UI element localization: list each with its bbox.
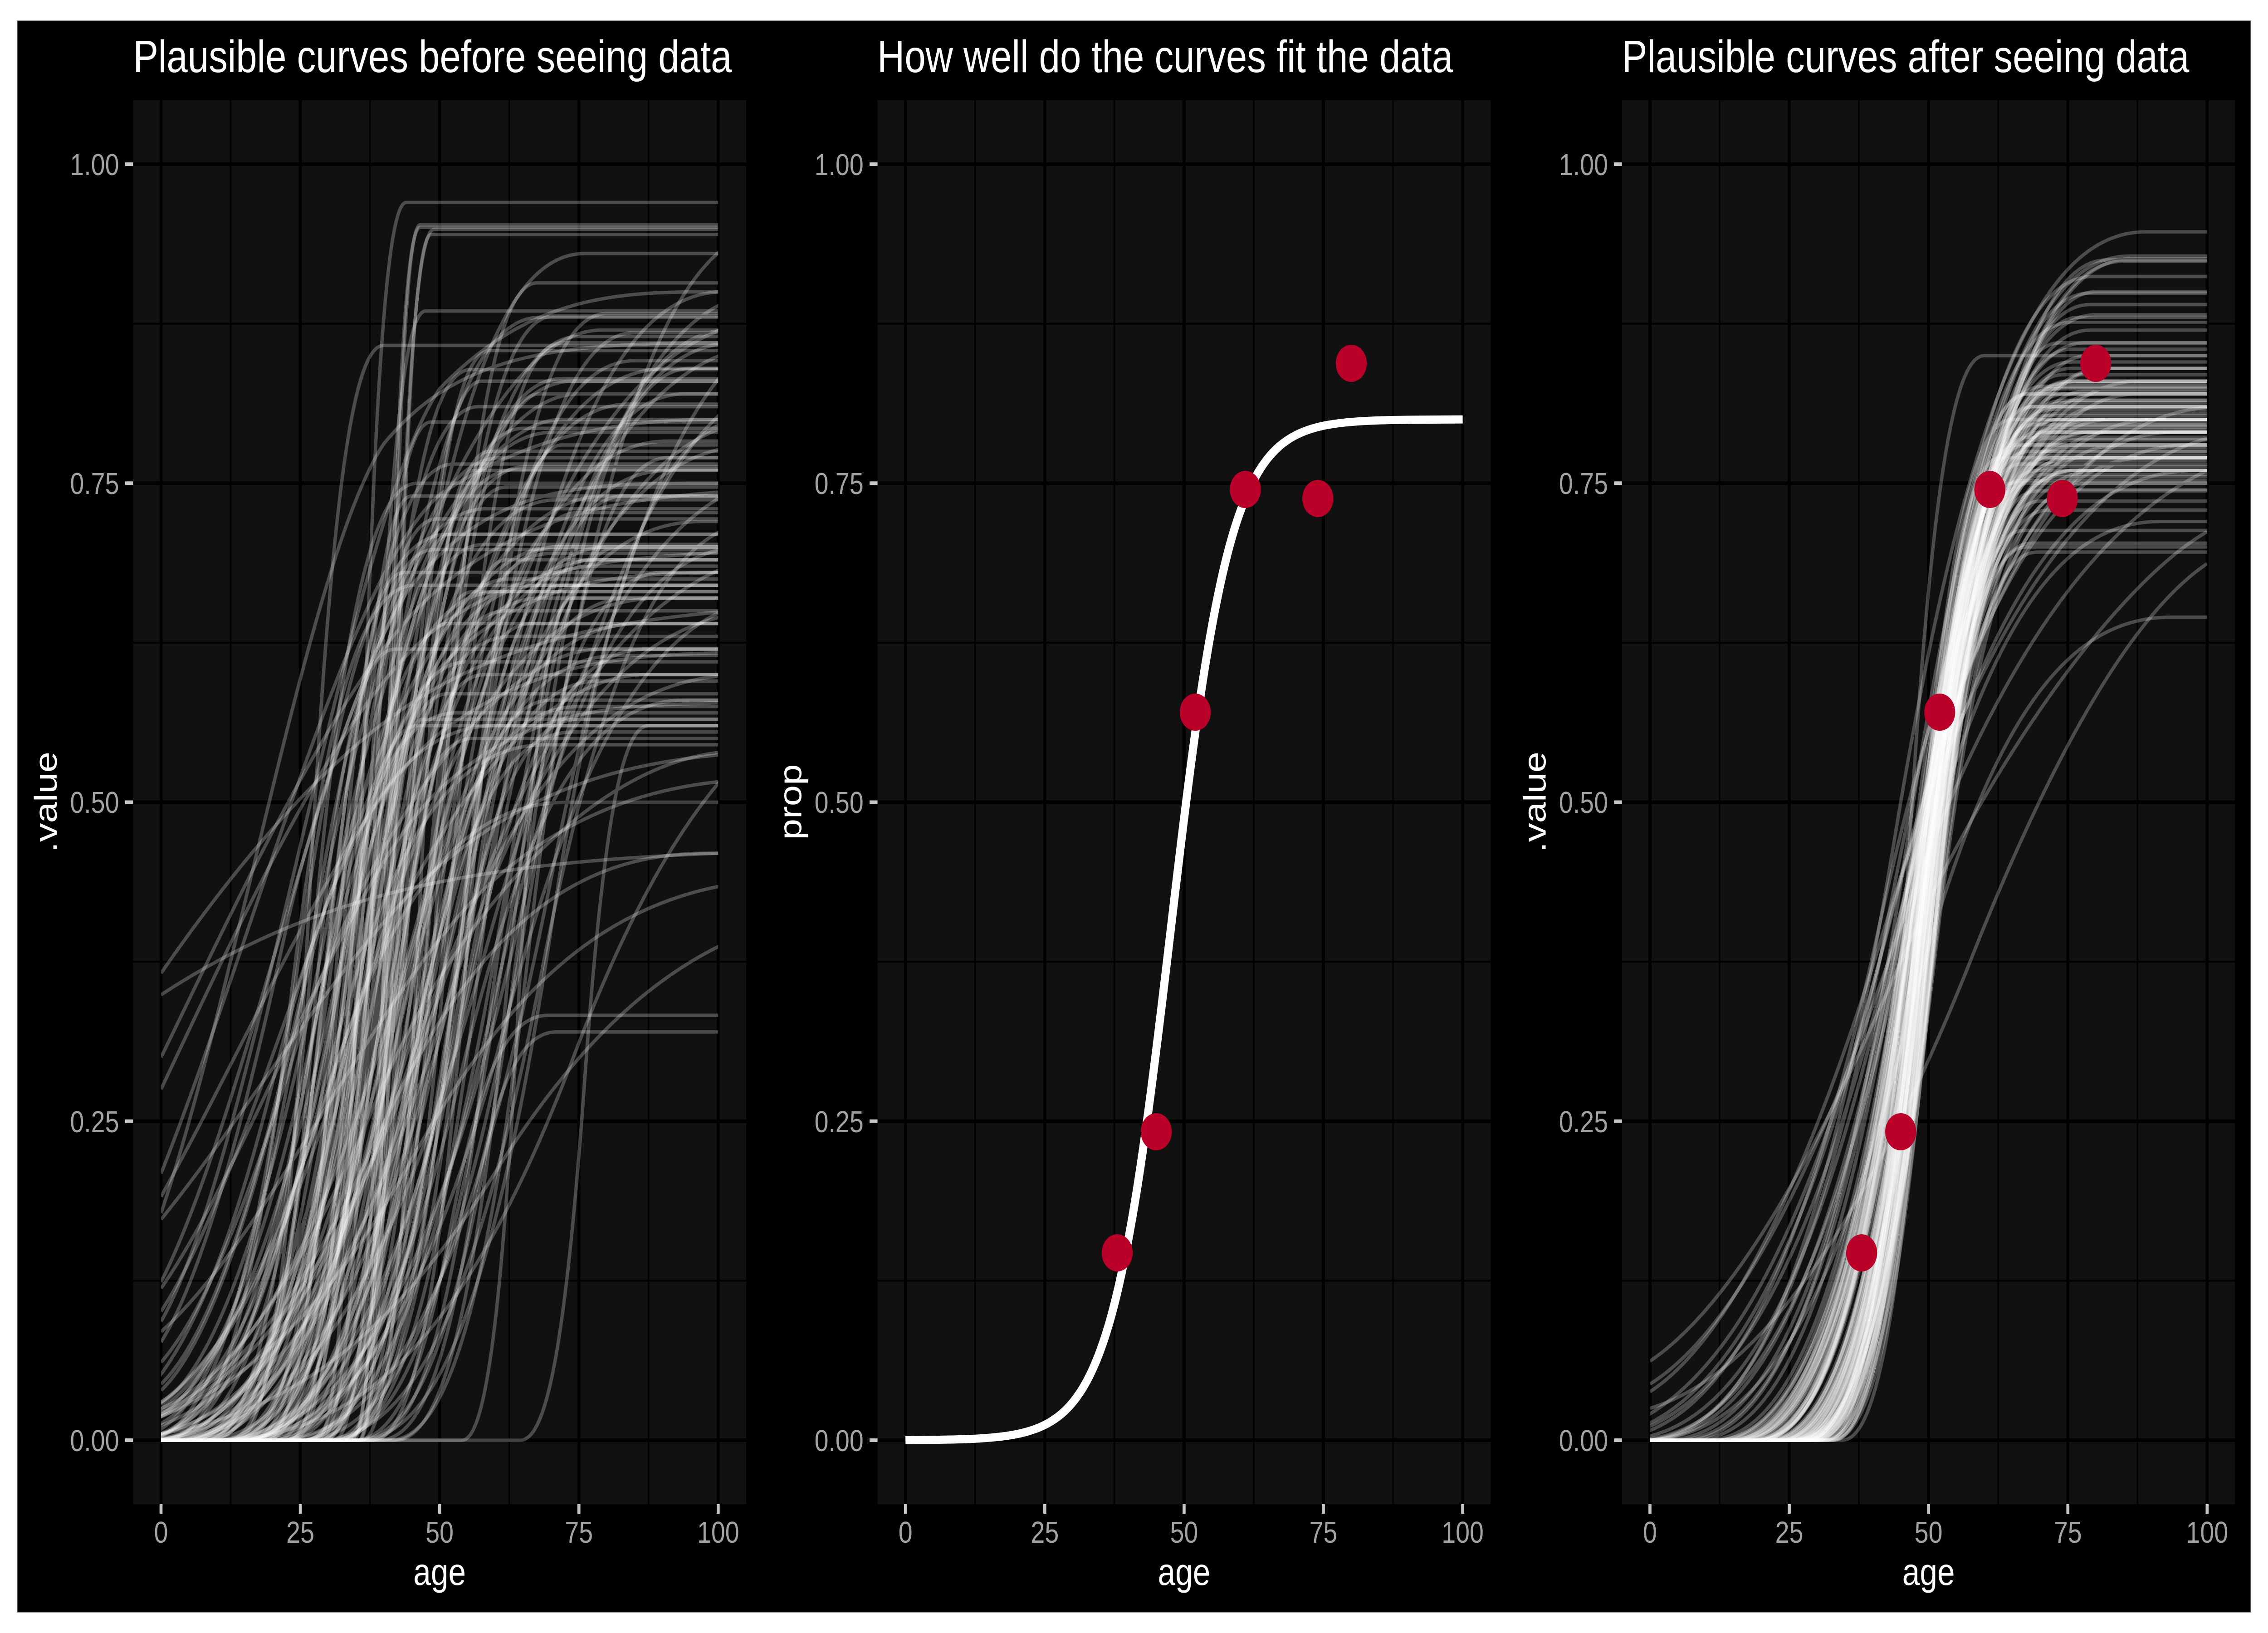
y axis tick labels: 0.75 (1559, 467, 1608, 501)
y axis tick labels: 0.25 (1559, 1105, 1608, 1139)
x axis tick labels: 100 (2186, 1516, 2228, 1550)
y axis title: .value (29, 752, 64, 852)
plot area and axis ticks (1614, 100, 2235, 1514)
line chart: posterior logistic curves (1650, 230, 2207, 1442)
y axis title: prop (773, 764, 808, 840)
y axis tick labels: 1.00 (815, 148, 864, 182)
x axis tick labels: 25 (1775, 1516, 1803, 1550)
title: curve fit: How well do the curves fit the data (877, 31, 1453, 82)
fitted logistic curve (905, 420, 1463, 1440)
x axis tick labels: 0 (154, 1516, 168, 1550)
y axis tick labels: 0.25 (815, 1105, 864, 1139)
x axis tick labels: 75 (1310, 1516, 1337, 1550)
title: before seeing data: Plausible curves before seeing data (133, 31, 732, 82)
panel: plausible curves after seeing data (1518, 31, 2235, 1593)
x axis tick labels (1643, 1516, 2228, 1550)
y axis tick labels: 0.75 (70, 467, 119, 501)
y axis tick labels (815, 148, 864, 1458)
x axis title: age (1158, 1551, 1210, 1593)
x axis title: age (413, 1551, 466, 1593)
data points (1846, 345, 2111, 1271)
x axis tick labels (899, 1516, 1484, 1550)
plot area and axis ticks (125, 100, 746, 1514)
x axis tick labels: 100 (1442, 1516, 1484, 1550)
line chart: prior logistic curves (161, 200, 719, 1442)
y axis tick labels: 1.00 (70, 148, 119, 182)
panel: plausible curves before seeing data (22, 31, 935, 1593)
x axis tick labels: 0 (1643, 1516, 1657, 1550)
y axis tick labels: 0.50 (1559, 786, 1608, 820)
x axis title: age (1902, 1551, 1955, 1593)
x axis tick labels (154, 1516, 739, 1550)
y axis tick labels: 0.00 (70, 1424, 119, 1458)
title: after seeing data: Plausible curves after seeing data (1622, 31, 2190, 82)
y axis tick labels: 0.00 (815, 1424, 864, 1458)
plot area and axis ticks (870, 100, 1491, 1514)
x axis tick labels: 25 (286, 1516, 314, 1550)
y axis tick labels: 0.00 (1559, 1424, 1608, 1458)
x axis tick labels: 0 (899, 1516, 913, 1550)
y axis tick labels: 1.00 (1559, 148, 1608, 182)
y axis tick labels: 0.50 (70, 786, 119, 820)
x axis tick labels: 25 (1031, 1516, 1059, 1550)
y axis title: .value (1518, 752, 1553, 852)
x axis tick labels: 75 (565, 1516, 593, 1550)
x axis tick labels: 100 (697, 1516, 739, 1550)
y axis tick labels: 0.75 (815, 467, 864, 501)
x axis tick labels: 75 (2054, 1516, 2082, 1550)
x axis tick labels: 50 (1915, 1516, 1943, 1550)
y axis tick labels (70, 148, 119, 1458)
panel: how well do the curves fit the data (773, 31, 1491, 1593)
y axis tick labels (1559, 148, 1608, 1458)
x axis tick labels: 50 (1170, 1516, 1198, 1550)
y axis tick labels: 0.50 (815, 786, 864, 820)
data points (1102, 345, 1367, 1271)
y axis tick labels: 0.25 (70, 1105, 119, 1139)
x axis tick labels: 50 (425, 1516, 454, 1550)
